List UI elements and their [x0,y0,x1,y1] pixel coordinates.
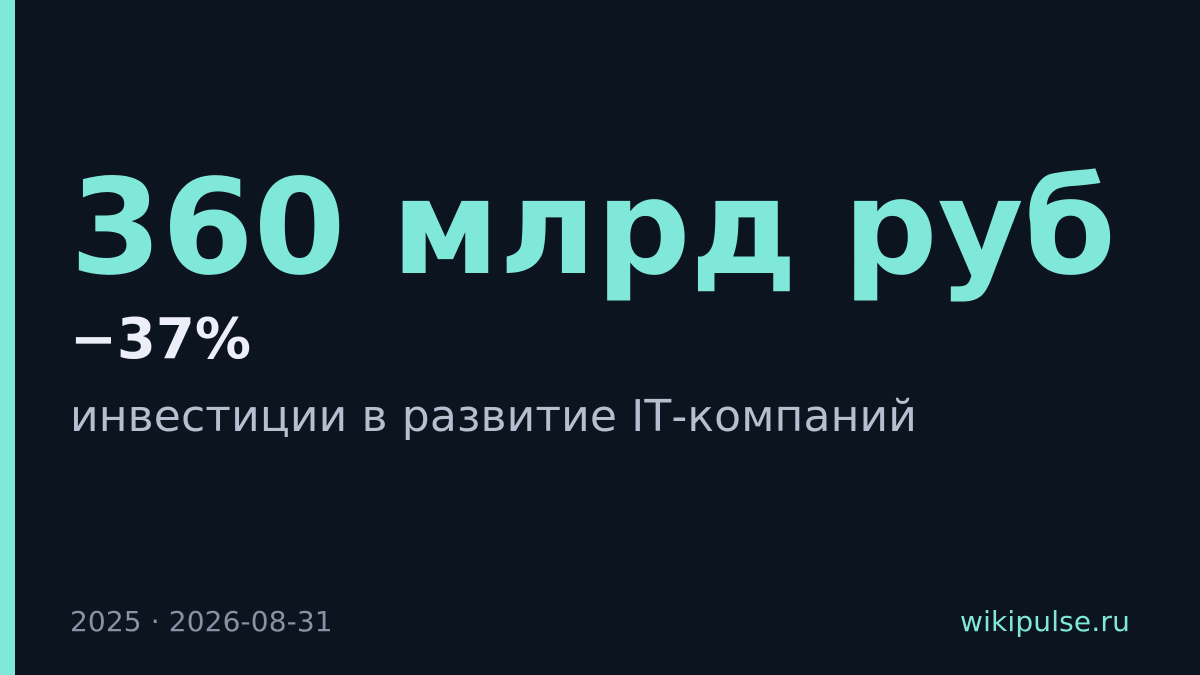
accent bar [0,0,15,675]
headline value: 360 млрд руб [70,151,1116,305]
change percentage: −37% [70,307,251,372]
description: инвестиции в развитие IT-компаний [70,391,917,442]
source domain: wikipulse.ru [960,605,1130,638]
date line: 2025 · 2026-08-31 [70,605,333,638]
